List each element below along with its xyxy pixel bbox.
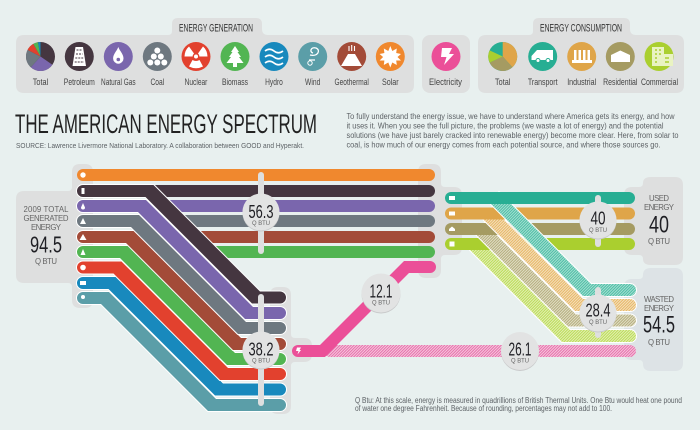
- icon: total consumption pie: [488, 42, 517, 71]
- icon: geothermal: [337, 42, 366, 71]
- panel: wasted energy: [624, 268, 683, 371]
- label: wind: Wind: [305, 77, 320, 88]
- callout: 26.1 q btu: 26.1: [508, 340, 532, 360]
- callout: 28.4 q btu: [580, 287, 616, 338]
- callout: 38.2 q btu: 38.2: [248, 340, 274, 360]
- source icons on flow bars: [80, 172, 86, 299]
- callout: 56.3 q btu: Q BTU: [252, 220, 270, 227]
- label: petroleum: Petroleum: [64, 77, 95, 88]
- icon: nuclear: [182, 42, 210, 71]
- label: natural gas: Natural Gas: [101, 77, 136, 88]
- intro text block: it uses it. When you see the full picture, the problems (we waste a lot of energy) and the potential: [346, 122, 664, 130]
- label: industrial: Industrial: [567, 77, 596, 88]
- icon: natural gas: [104, 42, 133, 71]
- panel: collector strip: [270, 287, 312, 414]
- label: hydro: Hydro: [265, 77, 283, 88]
- icon: hydro: [260, 42, 288, 71]
- label: biomass: Biomass: [222, 77, 248, 88]
- chart: generation flows: [77, 175, 429, 411]
- panel: energy generation legend: [16, 18, 414, 93]
- panel: total generated energy: Q BTU: [35, 257, 57, 266]
- label: residential: Residential: [603, 77, 637, 88]
- label: transport: Transport: [528, 77, 558, 88]
- callout: 12.1 q btu: Q BTU: [372, 300, 390, 306]
- panel: wasted energy: 54.5: [643, 312, 675, 338]
- intro text block: To fully understand the energy issue, we have to understand where America gets its energy, and how: [346, 112, 675, 121]
- intro text block: [346, 112, 679, 150]
- icon: industrial: [567, 42, 596, 71]
- label: coal: Coal: [150, 77, 164, 88]
- callout: 28.4 q btu: Q BTU: [589, 319, 607, 326]
- panel: total generated energy: 94.5: [30, 232, 62, 258]
- panel: total generated energy: ENERGY: [31, 223, 62, 232]
- panel: energy consumption legend: [478, 18, 684, 93]
- panel: total generated energy: 2009 TOTAL: [24, 205, 69, 214]
- callout: 56.3 q btu: [242, 172, 280, 254]
- icon: electricity node: [296, 348, 301, 354]
- panel: electricity legend: [422, 35, 470, 93]
- panel: total generated energy: GENERATED: [24, 214, 69, 223]
- callout: 12.1 q btu: [362, 274, 400, 314]
- icon: residential: [606, 42, 635, 71]
- label: total: Total: [33, 77, 48, 88]
- footnote: of water one degree Fahrenheit. Because of rounding, percentages may not add to 100.: [355, 404, 612, 413]
- source line: SOURCE: Lawrence Livermore National Laboratory. A collaboration between GOOD and Hyperakt.: [16, 143, 304, 150]
- callout: 40 q btu: Q BTU: [589, 227, 607, 234]
- label: geothermal: Geothermal: [335, 77, 369, 88]
- label: commercial: Commercial: [641, 77, 678, 88]
- icon: solar: [376, 42, 405, 71]
- icon: petroleum: [65, 42, 94, 71]
- panel: used energy: USED: [649, 194, 669, 203]
- panel: used energy: ENERGY: [644, 203, 675, 212]
- chart: electricity flow: [298, 267, 430, 351]
- callout: 28.4 q btu: 28.4: [586, 300, 610, 320]
- panel: used energy: Q BTU: [648, 237, 670, 246]
- panel: wasted energy: Q BTU: [648, 338, 670, 347]
- callout: 38.2 q btu: [242, 294, 280, 406]
- label: total: Total: [495, 77, 510, 88]
- callout: 38.2 q btu: Q BTU: [252, 358, 270, 364]
- heading: energy consumption: ENERGY CONSUMPTION: [540, 22, 622, 34]
- icon: transport: [528, 42, 557, 71]
- callout: 40 q btu: [580, 195, 616, 247]
- title: THE AMERICAN ENERGY SPECTRUM: [15, 109, 317, 139]
- icon: total generation pie: [26, 42, 55, 71]
- callout: 26.1 q btu: [501, 332, 539, 371]
- label: solar: Solar: [382, 77, 399, 88]
- icon: biomass: [220, 42, 250, 71]
- consumption icons on flow bars: [449, 196, 455, 246]
- chart: consumption flows: [451, 192, 636, 342]
- callout: 40 q btu: 40: [590, 208, 606, 228]
- footnote: [355, 396, 682, 413]
- panel: used energy: [624, 177, 683, 265]
- heading: energy generation: ENERGY GENERATION: [179, 22, 253, 34]
- label: electricity: Electricity: [429, 77, 462, 88]
- chart: wasted electricity hatched bar: [330, 345, 630, 357]
- icon: electricity bolt: [432, 42, 460, 71]
- callout: 26.1 q btu: Q BTU: [511, 358, 529, 364]
- icon: commercial: [644, 42, 674, 71]
- panel: total generated energy: [16, 164, 93, 308]
- panel: wasted energy: ENERGY: [644, 304, 675, 313]
- intro text block: solutions (we have just barely cracked into renewable energy) become more clear. Here, from solar to: [346, 131, 679, 140]
- panel: wasted energy: WASTED: [644, 295, 674, 304]
- label: nuclear: Nuclear: [185, 77, 207, 88]
- panel: consumption source strip: [418, 164, 462, 278]
- callout: 12.1 q btu: 12.1: [370, 282, 392, 302]
- callout: 56.3 q btu: 56.3: [248, 202, 274, 222]
- intro text block: coal, is how much of our energy comes from each potential source, and where those sources go.: [346, 140, 660, 150]
- panel: used energy: 40: [649, 212, 669, 238]
- icon: wind: [298, 42, 327, 71]
- icon: coal: [143, 42, 172, 71]
